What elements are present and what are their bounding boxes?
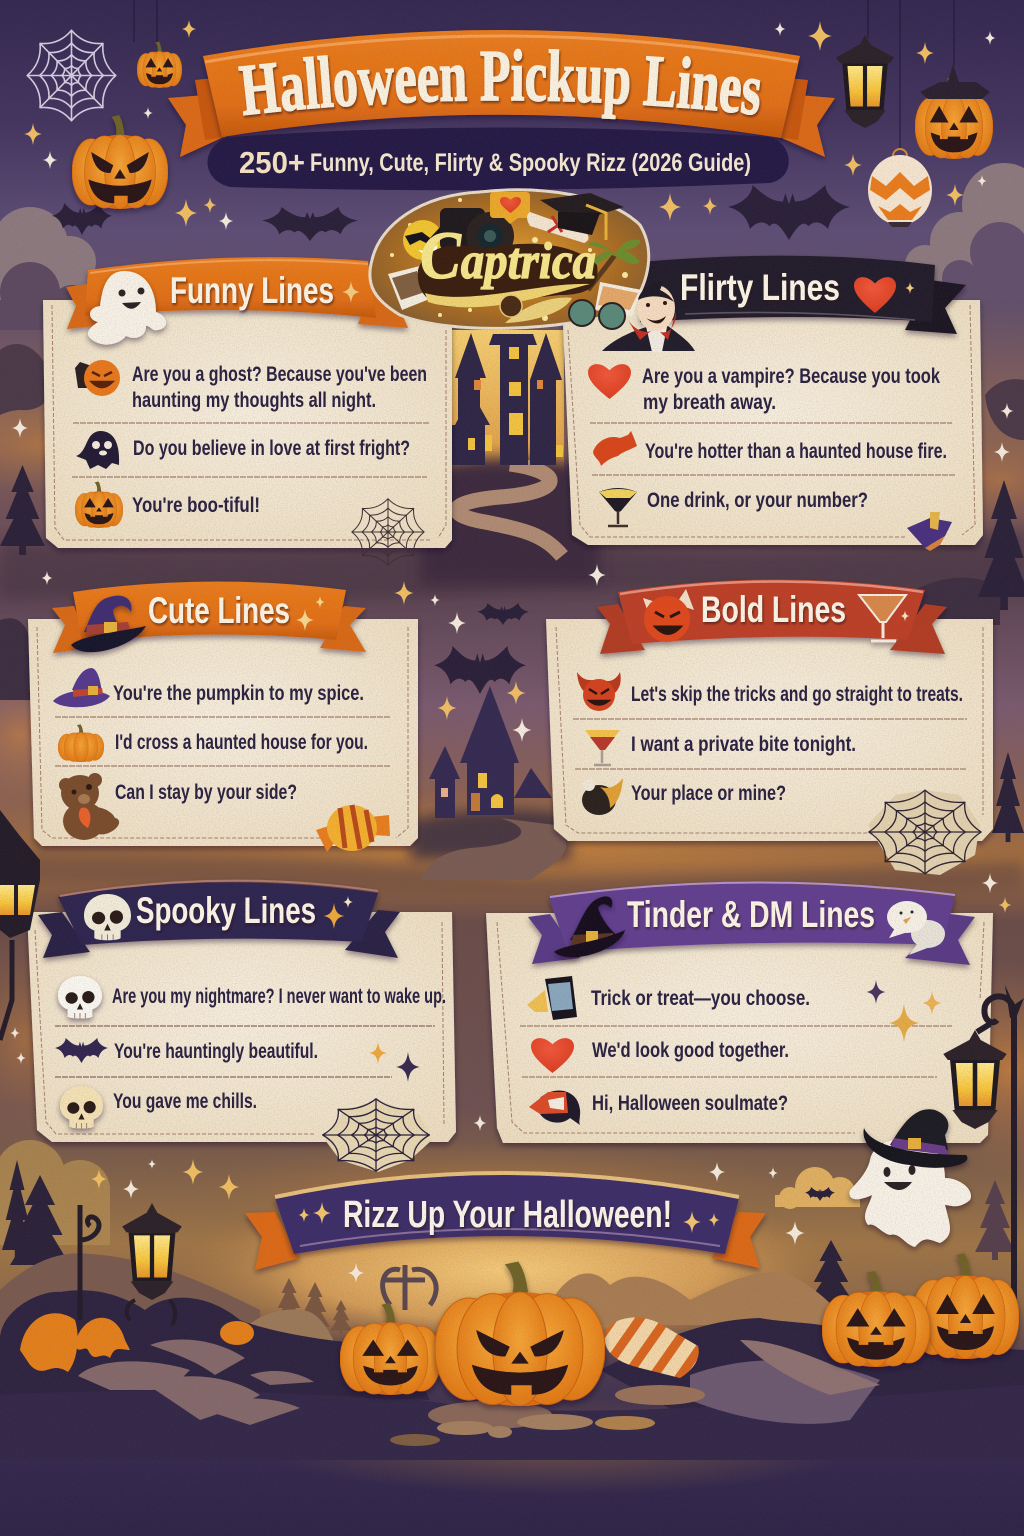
icon: left photo — [388, 266, 432, 310]
icon: white skull — [58, 976, 102, 1019]
line: breath: my breath away. — [643, 390, 776, 414]
icon: bottom right pumpkin back — [912, 1253, 1019, 1359]
icon: pumpkin — [58, 724, 104, 762]
icon: star — [905, 282, 915, 294]
heading ribbon: bold lines — [597, 579, 947, 654]
scene: second haunted house — [410, 686, 570, 880]
title text: Halloween Pickup Lines — [238, 48, 762, 122]
panel: bold lines — [546, 619, 993, 875]
icon: star — [901, 610, 909, 622]
icon: diploma — [527, 212, 589, 243]
logo swoosh — [425, 284, 590, 307]
icon: witch hat on tinder banner — [554, 896, 625, 957]
brown mound — [235, 1310, 338, 1348]
icon: witch hat — [863, 1109, 967, 1168]
icon: gift box — [907, 512, 952, 551]
logo background — [370, 190, 649, 328]
panel: funny lines — [43, 300, 452, 565]
logo wordmark: Captrica — [420, 217, 596, 293]
heading ribbon: funny lines — [66, 257, 408, 329]
icon: heart bubble — [490, 192, 530, 224]
icon: cocktail glass — [859, 595, 906, 641]
icon: right photo — [595, 282, 642, 316]
title ribbon — [168, 30, 835, 160]
icon: left stars — [298, 1202, 331, 1224]
line: side: Can I stay by your side? — [115, 780, 297, 804]
icon: left half pumpkins — [20, 1313, 254, 1372]
logo sparkles — [390, 198, 628, 321]
icon: heart — [588, 364, 631, 399]
icon: hanging lantern — [836, 0, 894, 128]
icon: footer street lantern — [80, 1203, 182, 1325]
line: place: Your place or mine? — [631, 781, 786, 805]
icon: star pair — [296, 596, 325, 631]
heading ribbon: cute lines — [52, 581, 366, 653]
line: trick: Trick or treat—you choose. — [591, 986, 810, 1010]
icon: street lantern left — [0, 810, 40, 1040]
icon: devil face — [643, 589, 694, 642]
right tan hills — [540, 1272, 850, 1325]
dark mounds right — [600, 1318, 1024, 1425]
line: bite: I want a private bite tonight. — [631, 732, 856, 756]
icon: right stars — [683, 1211, 720, 1233]
footer text: Rizz Up Your Halloween! — [343, 1194, 672, 1236]
heading text: Flirty Lines — [680, 267, 840, 308]
icon: bottom centre large pumpkin — [435, 1261, 605, 1406]
heading text: Tinder & DM Lines — [627, 894, 875, 935]
line: fright: Do you believe in love at first fright? — [133, 436, 410, 460]
icon: bat — [55, 1038, 108, 1063]
icon: street lantern right — [943, 985, 1024, 1300]
tree row silhouettes — [274, 1278, 352, 1334]
dark mounds left — [0, 1290, 430, 1401]
icon: sunglasses emoji — [403, 220, 443, 260]
logo text backing — [418, 244, 598, 307]
heading text: Bold Lines — [701, 589, 846, 630]
icon: spider web — [868, 790, 981, 875]
heading text: Cute Lines — [148, 590, 290, 631]
subtitle pill — [208, 128, 789, 190]
icon: pumpkin — [75, 481, 123, 528]
icon: heart — [531, 1038, 574, 1073]
icon: cocktail — [585, 730, 620, 765]
icon: flame — [593, 431, 637, 466]
line: beautiful: You're hauntingly beautiful. — [114, 1039, 318, 1063]
icon: striped candy — [605, 1318, 699, 1378]
icon: witch hat on cute banner — [71, 596, 146, 652]
icon: vampire character — [602, 280, 695, 352]
line: chills: You gave me chills. — [113, 1089, 257, 1113]
icon: purple hat — [53, 668, 110, 707]
subtitle pill: Funny, Cute, Flirty & Spooky Rizz (2026 Guide) — [310, 149, 751, 177]
ribbon body — [203, 30, 800, 138]
icon: camera — [440, 208, 514, 260]
line: cross: I'd cross a haunted house for you. — [115, 730, 368, 754]
line: ghost: Are you a ghost? Because you've been — [132, 362, 427, 386]
footer ground: dark terrain — [0, 1253, 1024, 1460]
icon: chat bubbles — [887, 901, 945, 955]
icon: sparkle stars — [369, 1042, 420, 1082]
icon: spider web — [323, 1099, 432, 1172]
ribbon body — [275, 1174, 739, 1254]
icon: bottom centre small pumpkin — [340, 1303, 441, 1395]
stepping stones — [390, 1385, 705, 1446]
heading ribbon: flirty lines — [640, 256, 966, 334]
icon: pumpkin lantern — [915, 0, 993, 159]
line: pumpkin: You're the pumpkin to my spice. — [113, 681, 364, 705]
line: ghost continued: haunting my thoughts all night. — [132, 388, 376, 412]
icon: devil — [577, 672, 621, 711]
panel: flirty lines — [562, 300, 983, 551]
left ground patches — [78, 1339, 314, 1425]
panel: tinder and dm lines — [486, 913, 993, 1143]
icon: stars — [324, 896, 353, 929]
icon: hanging ornament — [868, 0, 932, 227]
icon: cream skull — [60, 1086, 103, 1129]
right ground patches — [690, 1360, 880, 1424]
icon: small hanging pumpkin — [134, 0, 182, 88]
subtitle pill: 250+ — [239, 145, 305, 180]
icon: striped candy — [316, 805, 390, 852]
icon: grinning pumpkin — [75, 360, 120, 396]
icon: chestnut — [582, 778, 623, 815]
background trees — [0, 465, 1024, 1310]
heading ribbon: tinder and dm lines — [528, 882, 975, 965]
line: drink: One drink, or your number? — [647, 488, 868, 512]
far tan hills — [0, 1253, 260, 1345]
icon: phone — [527, 976, 577, 1020]
icon: ghost with witch hat — [849, 1109, 971, 1247]
line: nightmare: Are you my nightmare? I never want to wake up. — [112, 984, 446, 1008]
icon: teddy bear — [59, 773, 122, 840]
icon: top-left spider web — [27, 30, 116, 121]
heading ribbon: spooky lines — [38, 881, 400, 958]
scene: flying bats — [52, 185, 850, 694]
icon: sunglasses — [569, 300, 625, 329]
line: bootiful: You're boo-tiful! — [132, 493, 260, 517]
icon: dark cocktail — [599, 488, 637, 526]
icon: white ghost — [88, 271, 166, 345]
icon: large jack-o-lantern top left — [72, 115, 168, 209]
lower ground — [0, 1385, 1024, 1460]
icon: feather — [505, 298, 572, 323]
ribbon tails — [245, 1212, 766, 1270]
icon: graduation cap — [540, 193, 624, 240]
icon: heart — [854, 277, 896, 313]
icon: bat near cloud — [805, 1187, 835, 1201]
icon: chat bubble — [529, 1091, 580, 1125]
panel: cute lines — [28, 619, 418, 852]
heading text: Funny Lines — [170, 270, 334, 311]
icon: dark ghost — [76, 431, 119, 469]
icon: spider web — [352, 499, 424, 565]
icon: lens badge — [500, 295, 522, 317]
heading text: Spooky Lines — [136, 890, 316, 931]
icon: bottom right pumpkin front — [822, 1271, 930, 1367]
logo: captrica badge — [370, 190, 649, 329]
icon: star — [342, 281, 360, 303]
icon: sparkle stars — [866, 980, 942, 1042]
icon: palm tree — [588, 240, 640, 290]
background: purple clouds and hills — [0, 163, 1024, 1245]
line: together: We'd look good together. — [592, 1038, 789, 1062]
line: soulmate: Hi, Halloween soulmate? — [592, 1091, 788, 1115]
line: vampire: Are you a vampire? Because you took — [642, 364, 940, 388]
icon: skull — [84, 894, 131, 941]
panel: spooky lines — [27, 912, 456, 1172]
scene: graveyard gate — [383, 1265, 436, 1310]
footer ribbon — [245, 1173, 766, 1270]
ribbon tails — [168, 78, 835, 157]
scene: central haunted castle — [420, 330, 600, 585]
